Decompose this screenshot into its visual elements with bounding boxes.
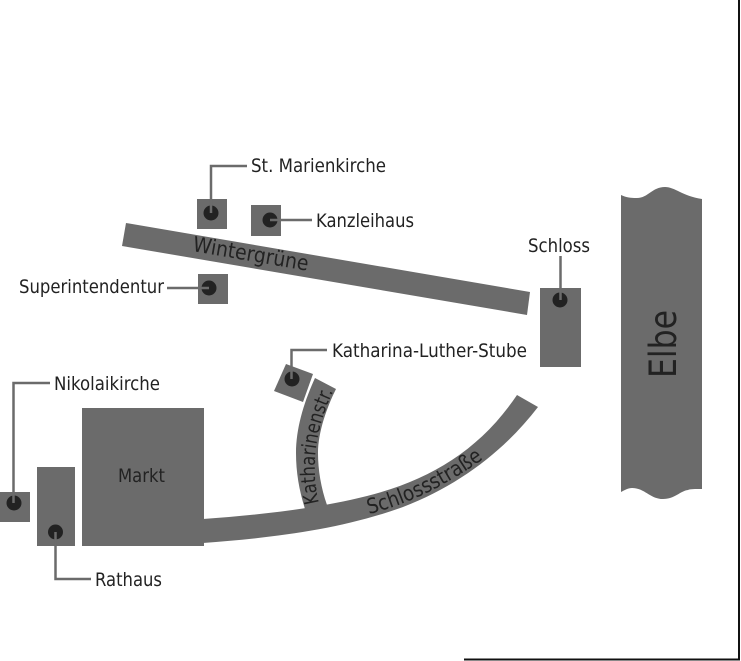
road: Schlossstraße: Schlossstraße [367, 452, 482, 514]
river: Elbe: Elbe [642, 310, 685, 378]
marker: Superintendentur: Superintendentur [19, 276, 164, 298]
road: Schlossstraße [204, 395, 538, 543]
marker: St. Marienkirche: St. Marienkirche [251, 155, 386, 177]
marker: Katharina-Luther-Stube: Katharina-Luther-Stube [332, 340, 527, 362]
marker: Schloss: Schloss [528, 235, 590, 257]
road: Katharinenstr.: Katharinenstr. [300, 390, 332, 504]
marker: Rathaus [37, 467, 162, 591]
marker: St. Marienkirche [197, 155, 386, 229]
square: Markt [82, 408, 204, 546]
road: Wintergrüne: Wintergrüne [191, 232, 311, 276]
marker: Nikolaikirche: Nikolaikirche [54, 373, 160, 395]
marker: Katharina-Luther-Stube [274, 340, 527, 402]
marker: Kanzleihaus [251, 205, 414, 236]
marker: Nikolaikirche [0, 373, 160, 522]
marker: Schloss [528, 235, 590, 367]
road: Wintergrüne [122, 223, 530, 315]
river: Elbe [621, 187, 702, 499]
marker: Superintendentur [19, 274, 228, 304]
marker: Kanzleihaus: Kanzleihaus [316, 210, 414, 232]
marker: Rathaus: Rathaus [95, 569, 162, 591]
square: Markt: Markt [118, 465, 165, 487]
